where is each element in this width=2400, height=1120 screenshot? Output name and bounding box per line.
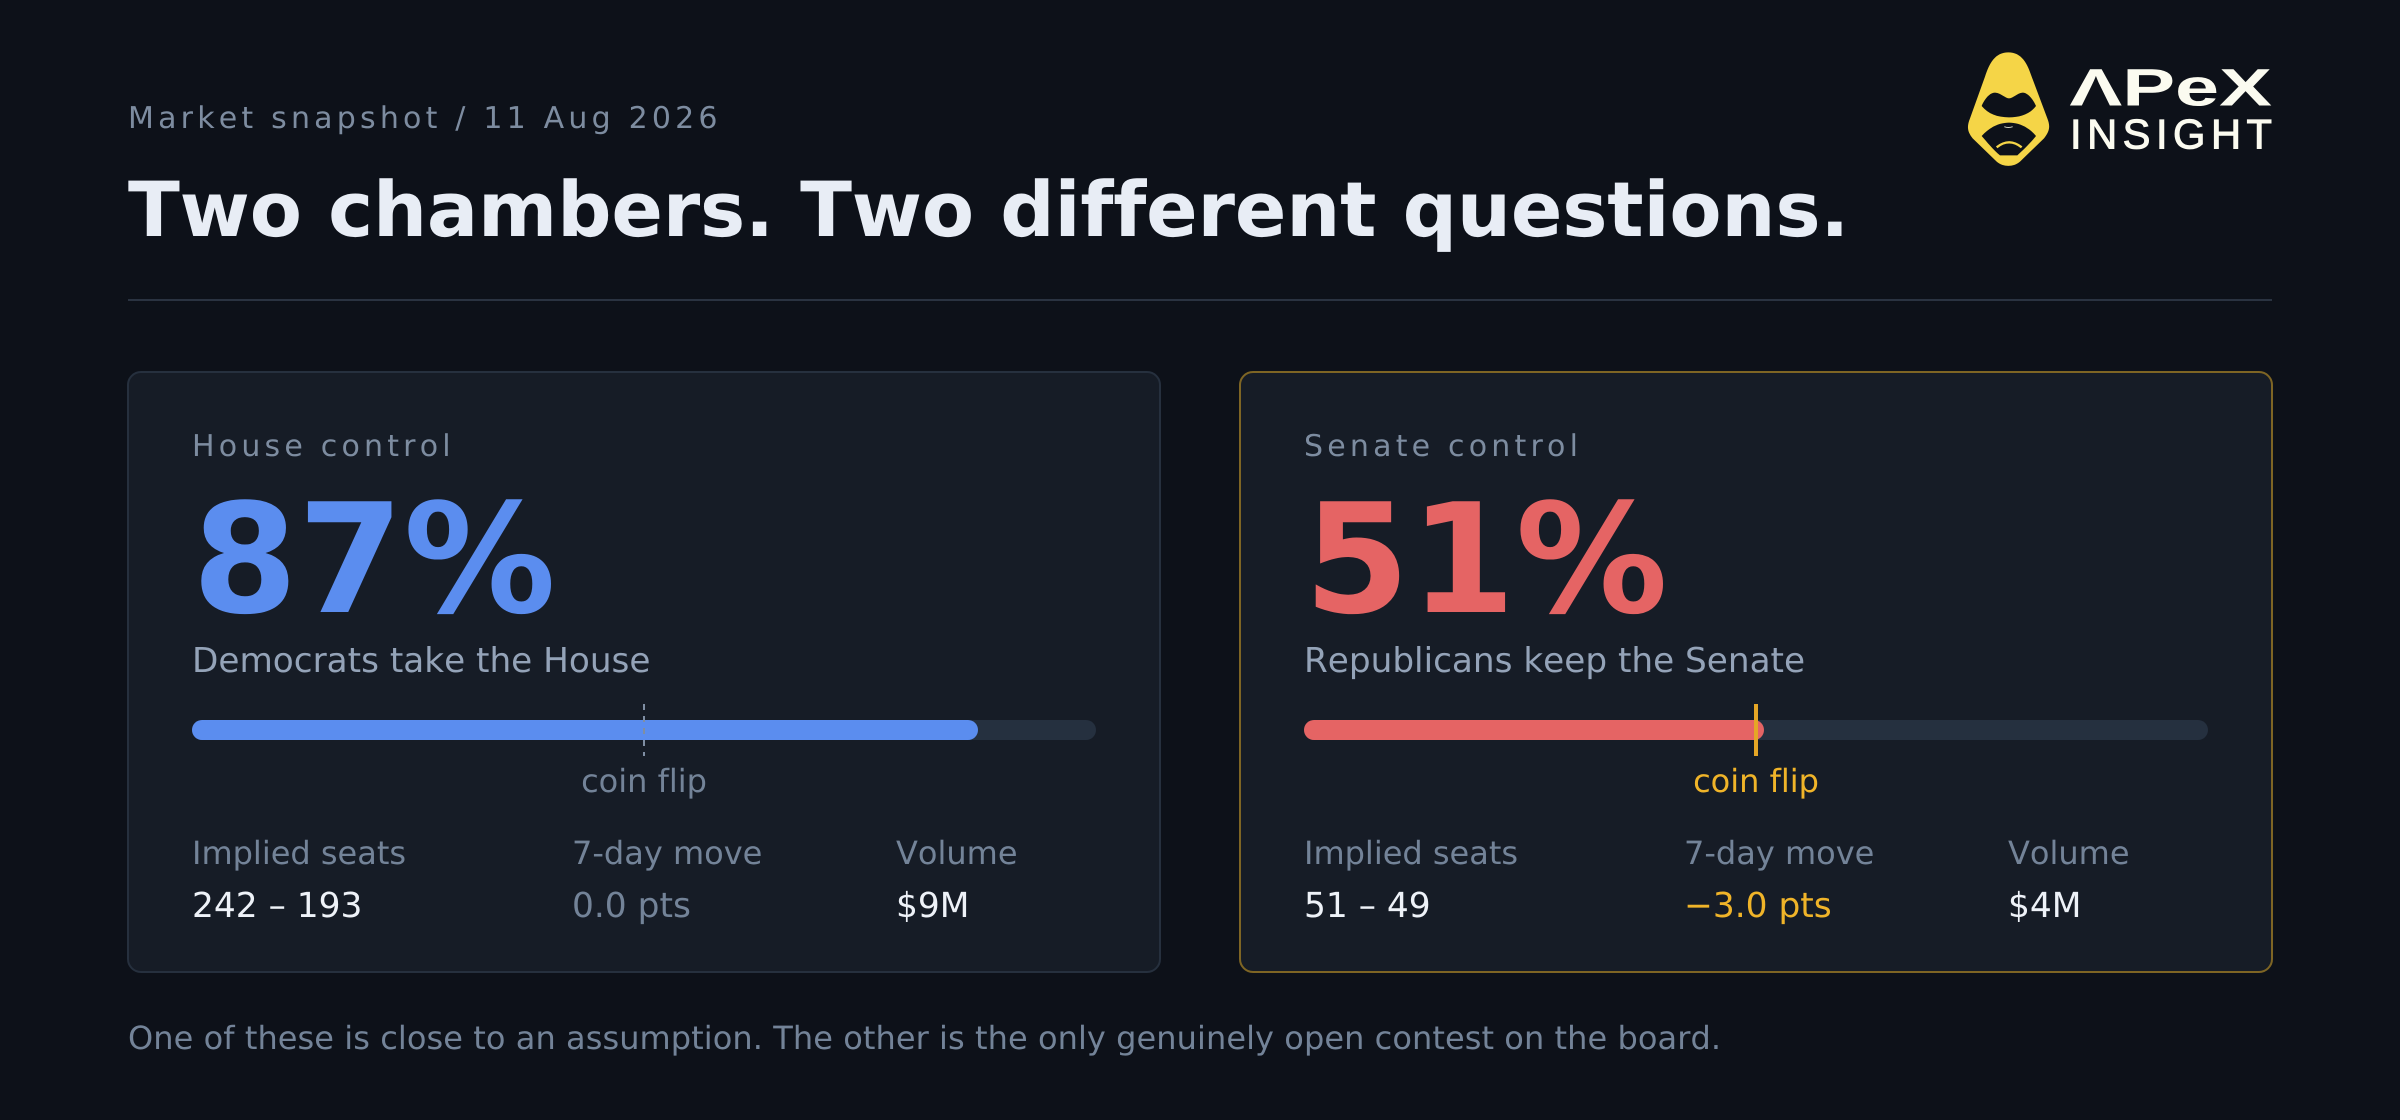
Senate coin flip marker [1754, 704, 1758, 756]
House 7-day move: 0.0 pts [572, 886, 691, 926]
Senate implied seats: 51 – 49 [1304, 886, 1431, 926]
House implied seats: Implied seats [192, 834, 406, 872]
House 7-day move [572, 834, 762, 926]
Senate outcome: Republicans keep the Senate [1304, 641, 1805, 681]
Senate implied seats [1304, 834, 1518, 926]
Senate label: Senate control [1304, 429, 1582, 464]
eyebrow: market snapshot date: Market snapshot / 11 Aug 2026 [128, 101, 722, 136]
icon: yellow shield mark [1968, 52, 2049, 166]
Senate volume: Volume [2008, 834, 2130, 872]
House outcome: Democrats take the House [192, 641, 650, 681]
House volume: $9M [896, 886, 969, 926]
panel: House control [127, 371, 1161, 973]
panel: Senate control [1239, 371, 2273, 973]
House 7-day move: 7-day move [572, 834, 762, 872]
Senate progress bar [1304, 720, 2208, 740]
House volume [896, 834, 1018, 926]
House volume: Volume [896, 834, 1018, 872]
Senate 7-day move [1684, 834, 1874, 926]
title: Two chambers. Two different questions. [128, 165, 1849, 254]
divider [128, 299, 2272, 301]
House implied seats: 242 – 193 [192, 886, 362, 926]
House probability: 87% [192, 471, 556, 648]
House implied seats [192, 834, 406, 926]
House progress bar [192, 720, 1096, 740]
Senate 7-day move: 7-day move [1684, 834, 1874, 872]
Senate probability: 51% [1304, 471, 1668, 648]
Senate coin flip label: coin flip [1693, 762, 1819, 800]
House coin flip label: coin flip [581, 762, 707, 800]
logo wordmark: ΛPeX [2069, 58, 2272, 117]
Senate volume [2008, 834, 2130, 926]
House coin flip marker [643, 704, 645, 756]
logo wordmark [2069, 58, 2272, 158]
footnote: One of these is close to an assumption. The other is the only genuinely open contest on the board. [128, 1019, 1721, 1057]
Senate volume: $4M [2008, 886, 2081, 926]
logo: Apex Insight [1968, 52, 2272, 166]
logo wordmark: INSIGHT [2070, 111, 2272, 158]
House label: House control [192, 429, 455, 464]
Senate 7-day move: −3.0 pts [1684, 886, 1832, 926]
Senate implied seats: Implied seats [1304, 834, 1518, 872]
